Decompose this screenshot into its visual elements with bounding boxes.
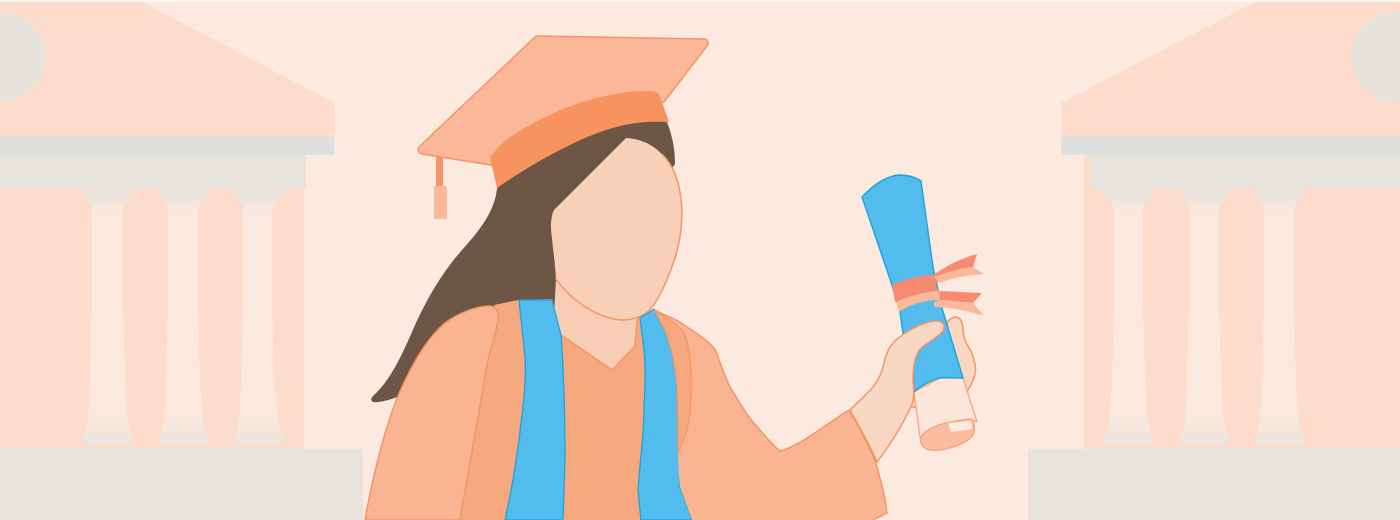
cap band [490,91,669,188]
right entablature [1091,155,1400,188]
right pediment [1061,2,1400,138]
right wall [1084,155,1400,450]
left plinth [0,449,363,520]
neckline stroke [561,320,637,370]
right sleeve [657,312,887,520]
right chest fold [654,309,691,453]
hair [371,121,675,402]
fourth ribbon tail [934,300,984,316]
face [551,138,682,320]
graduate figure [365,36,887,520]
right pediment circle [1352,12,1400,102]
left wall [0,155,304,450]
top ribbon tail [933,254,977,283]
right columns [1104,188,1304,445]
ribbon [892,254,984,316]
blue diploma [862,175,963,392]
left pediment circle [0,13,45,101]
diploma and hand [850,175,984,462]
left sleeve [365,306,498,520]
left columns [82,188,284,445]
cap top [418,36,708,165]
inner paper [948,421,972,432]
ribbon lower band [896,291,940,312]
tassel cord [436,154,443,187]
roll end [920,419,974,450]
left entablature [0,155,306,188]
forearm and hand [850,321,944,462]
fingers behind diploma [905,317,976,410]
third ribbon tail [939,291,982,303]
right building [1028,2,1400,520]
left building [0,2,363,520]
left cornice [0,137,334,155]
second ribbon tail [934,267,984,283]
neck [553,280,637,370]
right plinth [1028,449,1400,520]
right cornice [1061,137,1400,155]
ribbon upper band [892,275,938,302]
robe body [460,299,692,520]
face outline [556,155,682,320]
left stole [505,300,565,520]
left pediment [0,2,335,138]
mortarboard cap [418,36,708,219]
right stole [638,309,692,520]
top edge highlight [0,0,1400,2]
right sleeve outline [657,312,887,520]
paper roll [914,378,977,445]
tassel [434,186,447,219]
